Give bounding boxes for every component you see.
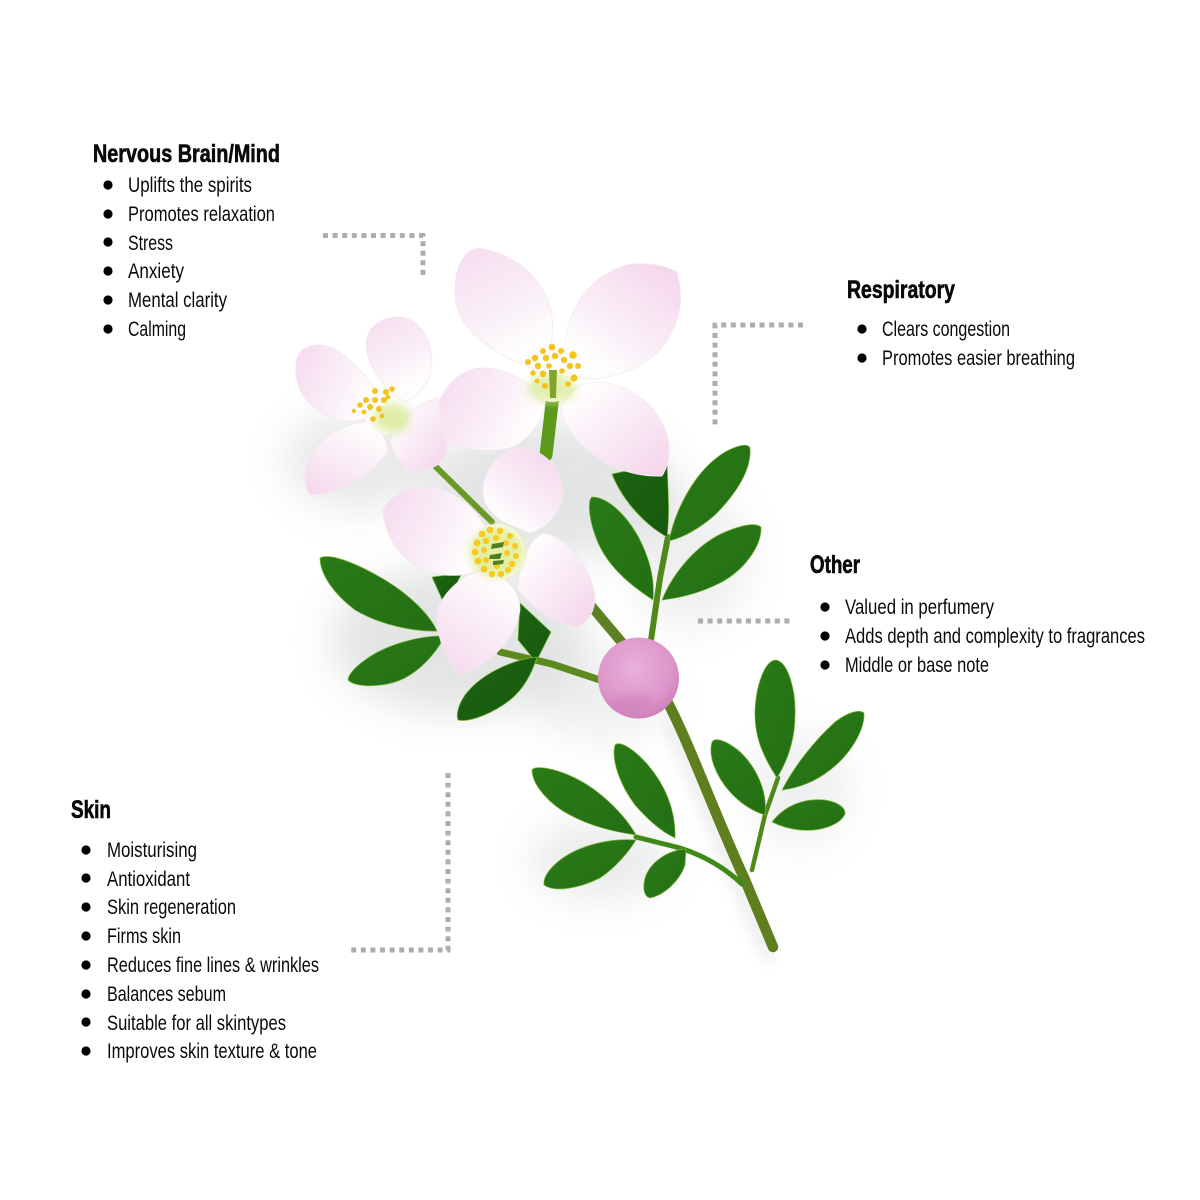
list: nervous benefits	[103, 174, 275, 341]
list: other benefits: Middle or base note	[845, 654, 989, 677]
list: skin benefits	[81, 839, 319, 1063]
stamens	[525, 344, 581, 389]
list: respiratory benefits: Promotes easier breathing	[882, 347, 1075, 370]
connector: other to plant	[698, 618, 790, 624]
list: nervous benefits: Anxiety	[128, 260, 184, 283]
flower: left	[296, 317, 447, 495]
list: skin benefits: Suitable for all skintypes	[107, 1012, 286, 1035]
soft shadows	[285, 410, 850, 960]
list: skin benefits: Reduces fine lines & wrinkles	[107, 954, 319, 977]
heading: Respiratory: Respiratory	[847, 276, 955, 304]
stamens	[352, 386, 395, 422]
list: respiratory benefits: Clears congestion	[882, 318, 1010, 341]
list: skin benefits: Moisturising	[107, 839, 197, 862]
list: skin benefits: Skin regeneration	[107, 896, 236, 919]
flower: top	[435, 248, 681, 476]
list: other benefits: Valued in perfumery	[845, 596, 994, 619]
list: respiratory benefits	[857, 318, 1075, 370]
stamens	[472, 527, 519, 577]
connector: skin to plant	[350, 773, 448, 950]
list: skin benefits: Firms skin	[107, 925, 181, 948]
leaves: left cluster	[320, 557, 551, 720]
list: nervous benefits: Mental clarity	[128, 289, 227, 312]
connector: respiratory to flower	[715, 325, 803, 425]
stems	[434, 395, 778, 947]
list: nervous benefits: Promotes relaxation	[128, 203, 275, 226]
connector: nervous to flower	[323, 236, 423, 277]
flower: bottom	[383, 448, 595, 675]
list: skin benefits: Improves skin texture & tone	[107, 1040, 317, 1063]
illustration: flowering plant	[285, 248, 864, 960]
list: other benefits	[820, 596, 1145, 677]
list: skin benefits: Antioxidant	[107, 868, 190, 891]
heading: Other: Other	[810, 551, 860, 579]
bud	[598, 638, 679, 718]
heading: Nervous Brain/Mind: Nervous Brain/Mind	[93, 140, 280, 168]
list: nervous benefits: Calming	[128, 318, 186, 341]
panel: Other	[810, 551, 1145, 677]
panel: Skin	[71, 796, 319, 1063]
list: nervous benefits: Stress	[128, 232, 173, 255]
heading: Skin: Skin	[71, 796, 111, 824]
list: skin benefits: Balances sebum	[107, 983, 226, 1006]
panel: Respiratory	[847, 276, 1075, 370]
leaves: lower cluster	[532, 660, 864, 898]
panel: Nervous Brain/Mind	[93, 140, 280, 341]
leaves: upper cluster	[589, 445, 761, 600]
list: nervous benefits: Uplifts the spirits	[128, 174, 252, 197]
